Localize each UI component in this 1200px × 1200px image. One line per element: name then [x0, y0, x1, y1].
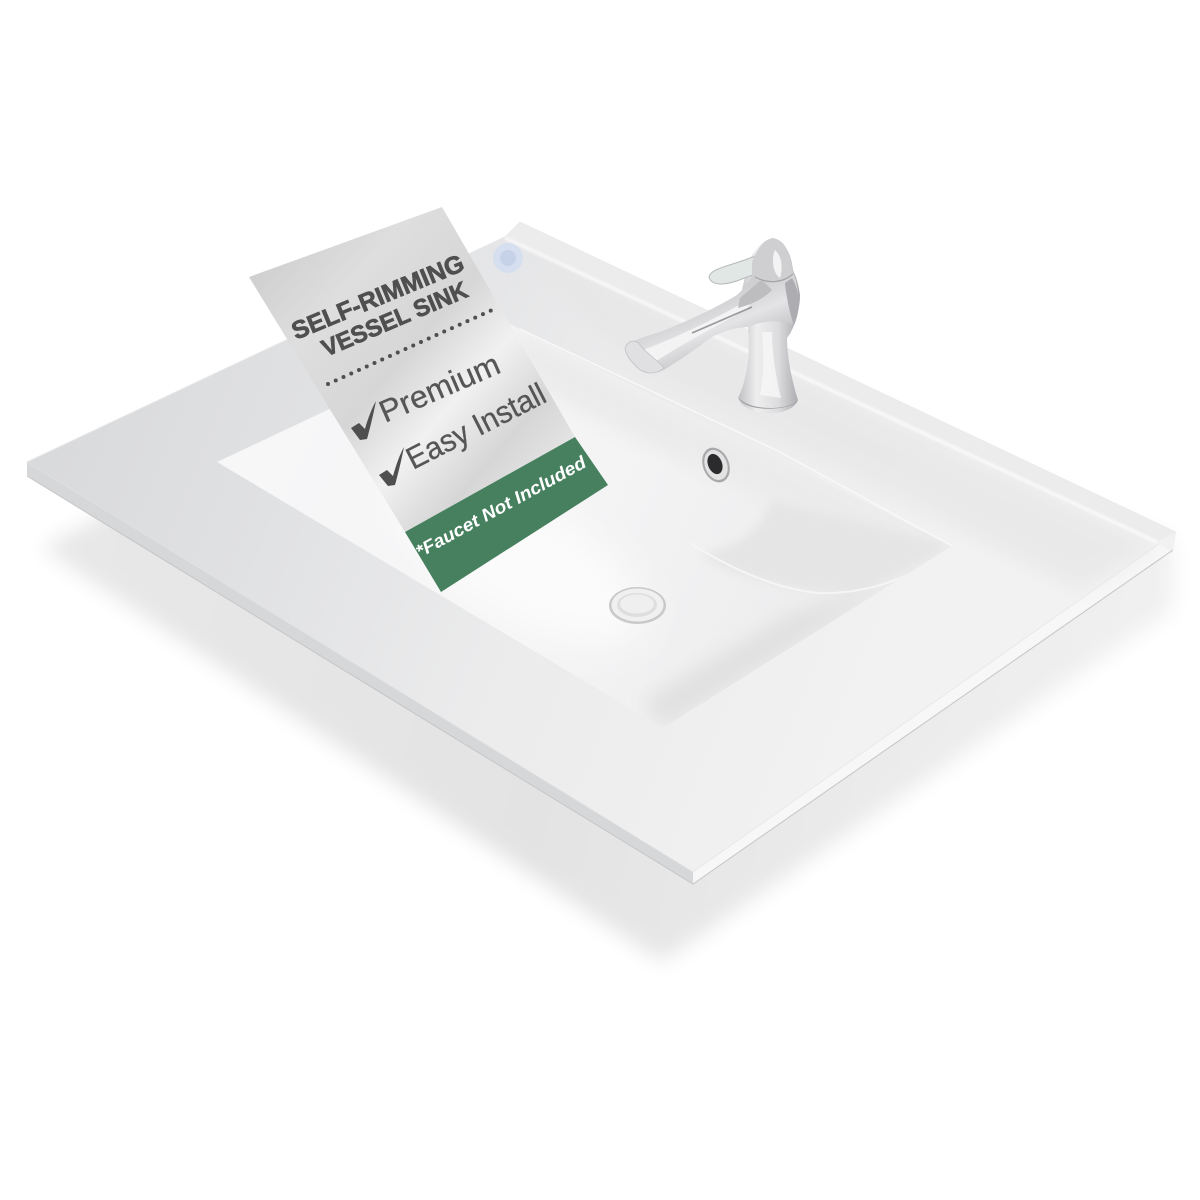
basin floor [217, 324, 952, 728]
base shadow [739, 398, 798, 409]
icon: check easy install [379, 447, 404, 486]
left edge thickness [27, 462, 693, 884]
basin shading [528, 345, 922, 720]
mounting sticker [493, 243, 523, 273]
banner text: *Faucet Not Included [412, 452, 590, 562]
spout highlight [638, 300, 750, 363]
right wall shading [652, 610, 831, 720]
card heading [288, 249, 473, 363]
benefit easy install: Easy Install [400, 376, 552, 476]
drain [609, 587, 666, 624]
right end cap [1157, 532, 1176, 553]
back ledge [505, 222, 1176, 542]
joint shading [738, 280, 772, 308]
ledge highlight line [505, 238, 1157, 542]
green banner [405, 437, 608, 592]
heading line 1: SELF-RIMMING [288, 249, 468, 346]
right neck shadow [785, 278, 799, 325]
card background [249, 207, 575, 532]
shade beside ledge [505, 240, 1157, 590]
heading line 2: VESSEL SINK [318, 276, 473, 363]
bowl shading [714, 508, 850, 584]
cap highlight [773, 250, 782, 278]
icon: check premium [351, 401, 376, 440]
dotted divider [328, 310, 492, 384]
cartridge cap [752, 238, 793, 280]
right front edge thickness [693, 532, 1176, 884]
spout tip [625, 341, 664, 373]
sink basin [217, 324, 952, 728]
basin rim light [520, 329, 952, 546]
lever handle [709, 254, 766, 284]
spout dark line [692, 307, 752, 333]
faucet body [738, 238, 800, 413]
spout [625, 272, 798, 373]
drop shadow [42, 300, 1172, 962]
info card [249, 207, 608, 592]
countertop [27, 222, 1176, 884]
product illustration [26, 207, 1176, 961]
body highlight [760, 332, 781, 398]
back wall shading [528, 345, 665, 432]
top surface [27, 222, 1176, 872]
faucet [625, 238, 800, 413]
front floor light [580, 582, 609, 617]
overflow hole [697, 443, 735, 487]
collar line [755, 274, 793, 282]
front edge lines [27, 476, 1173, 884]
bowl curve [706, 552, 904, 594]
benefit premium: Premium [374, 346, 505, 429]
